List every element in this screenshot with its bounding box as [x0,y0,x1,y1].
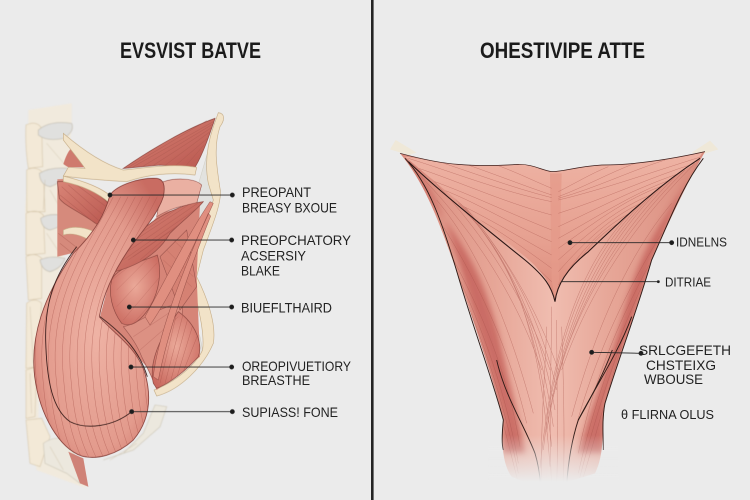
label: breasy bxoue: BREASY BXOUE [242,200,337,216]
divider [371,0,374,500]
callout leader lines [562,241,674,355]
main large muscle [33,178,165,458]
whole muscle body [400,152,705,490]
cream tendons and right border strip [63,113,224,396]
label: preopchatory: PREOPCHATORY [241,232,352,248]
bottom fade [488,435,618,493]
label: chsteixg: CHSTEIXG [646,357,716,373]
label: srlcgefeth: SRLCGEFETH [639,342,731,358]
label: flirna olus: θ FLIRNA OLUS [621,408,714,422]
darker side bands [405,157,703,453]
title: left panel: EVSVIST BATVE [120,38,261,63]
label: oreopivuetiory: OREOPIVUETIORY [242,358,352,374]
upper muscle fibres [408,157,700,285]
label: breasthe: BREASTHE [242,372,310,388]
labels: right panel [621,236,731,422]
label: blake: BLAKE [241,262,280,278]
inner lower muscles [100,202,213,390]
central tendon [550,173,562,300]
muscle fibres [34,196,158,457]
side contour lines [405,158,703,487]
panel: right front-view muscle illustration [390,140,718,493]
label: idnelns: IDNELNS [676,236,727,250]
upper left back muscles [57,146,112,257]
spine and vertebrae [25,103,167,488]
upper pale muscle and diagonal band [115,179,203,272]
shoulder tendon tips [390,140,718,155]
pale scapular panel [185,150,220,357]
panel: left side-view muscle illustration [25,103,234,488]
inner contour lines [46,247,147,426]
label: biueflthaird: BIUEFLTHAIRD [241,300,332,316]
title: right panel: OHESTIVIPE ATTE [480,38,645,63]
label: wbouse: WBOUSE [644,371,703,387]
label: preopant: PREOPANT [242,184,311,200]
label: ditriae: DITRIAE [665,276,711,290]
lower muscle fibres [408,163,695,493]
bottom tail muscle [68,452,88,487]
label: acsersiy: ACSERSIY [241,248,307,264]
muscle contour strokes [400,152,705,172]
labels: left panel [241,184,352,420]
top triangular muscle [123,118,215,168]
label: supiass fone: SUPIASS! FONE [242,404,338,420]
upper V-shaped muscle [400,152,705,307]
callout leader lines [108,193,234,414]
